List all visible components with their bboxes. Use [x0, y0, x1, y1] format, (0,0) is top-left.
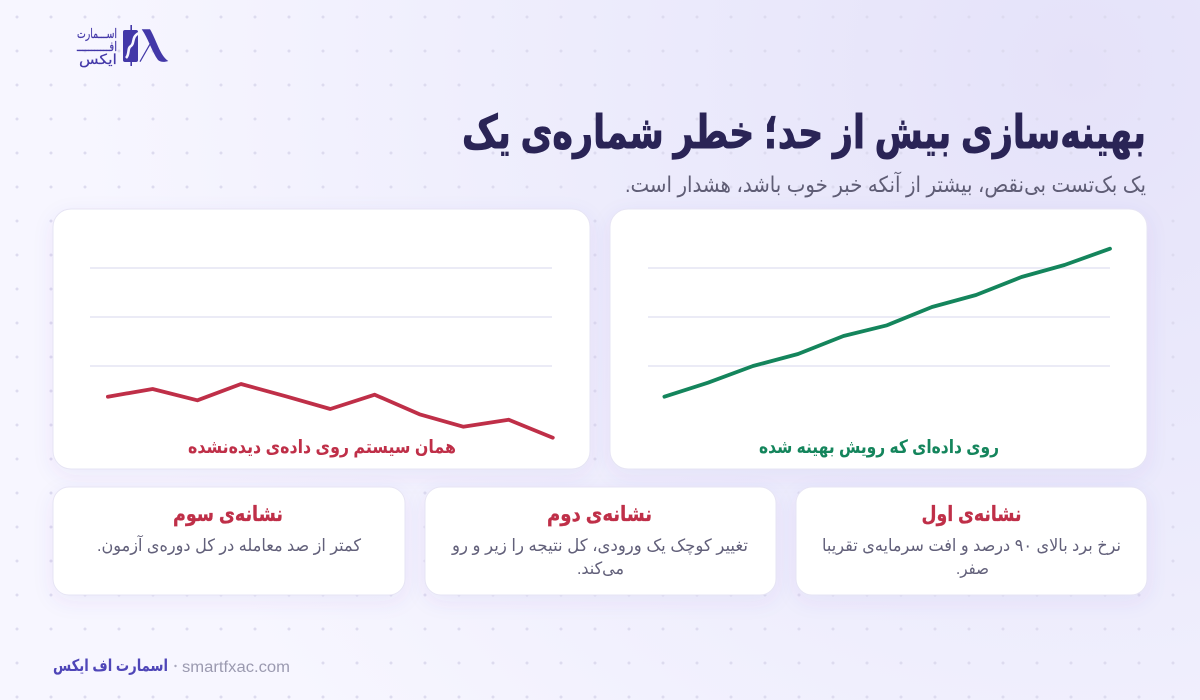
logo: Smart FX — [76, 25, 168, 68]
logo mark — [123, 25, 168, 66]
card body: نرخ برد بالای ۹۰ درصد و افت سرمایه‌ی تقریبا — [822, 536, 1121, 556]
logo wordmark: ایکس — [79, 51, 117, 68]
rising green equity line — [664, 249, 1110, 397]
card heading: نشانه‌ی اول — [922, 503, 1022, 526]
panel: sign one — [796, 487, 1147, 595]
card heading: نشانه‌ی سوم — [173, 503, 283, 526]
footer brand name: اسمارت اف ایکس — [53, 657, 168, 675]
falling red equity line — [108, 384, 553, 438]
chart caption: همان سیستم روی داده‌ی دیده‌نشده — [188, 436, 456, 458]
panel: sign three — [53, 487, 405, 595]
logo wordmark: اســـمارت — [77, 26, 117, 42]
panel: sign two — [425, 487, 776, 595]
logo wordmark: افـــــــــــ — [76, 39, 117, 54]
card body — [822, 536, 1121, 578]
card body: تغییر کوچک یک ورودی، کل نتیجه را زیر و رو — [451, 536, 748, 556]
subtitle: یک بک‌تست بی‌نقص، بیشتر از آنکه خبر خوب باشد، هشدار است. — [625, 171, 1146, 198]
card body: می‌کند. — [577, 559, 624, 578]
footer website: smartfxac.com — [182, 659, 290, 676]
panel: optimized-data chart — [610, 209, 1147, 469]
footer separator — [174, 665, 177, 667]
footer — [53, 657, 290, 676]
card heading: نشانه‌ی دوم — [547, 503, 652, 526]
panel: unseen-data chart — [53, 209, 590, 469]
card body: صفر. — [956, 559, 989, 578]
logo wordmark — [76, 26, 117, 68]
chart caption: روی داده‌ای که رویش بهینه شده — [759, 436, 999, 458]
card body — [451, 536, 748, 578]
card body: کمتر از صد معامله در کل دوره‌ی آزمون. — [97, 534, 362, 555]
